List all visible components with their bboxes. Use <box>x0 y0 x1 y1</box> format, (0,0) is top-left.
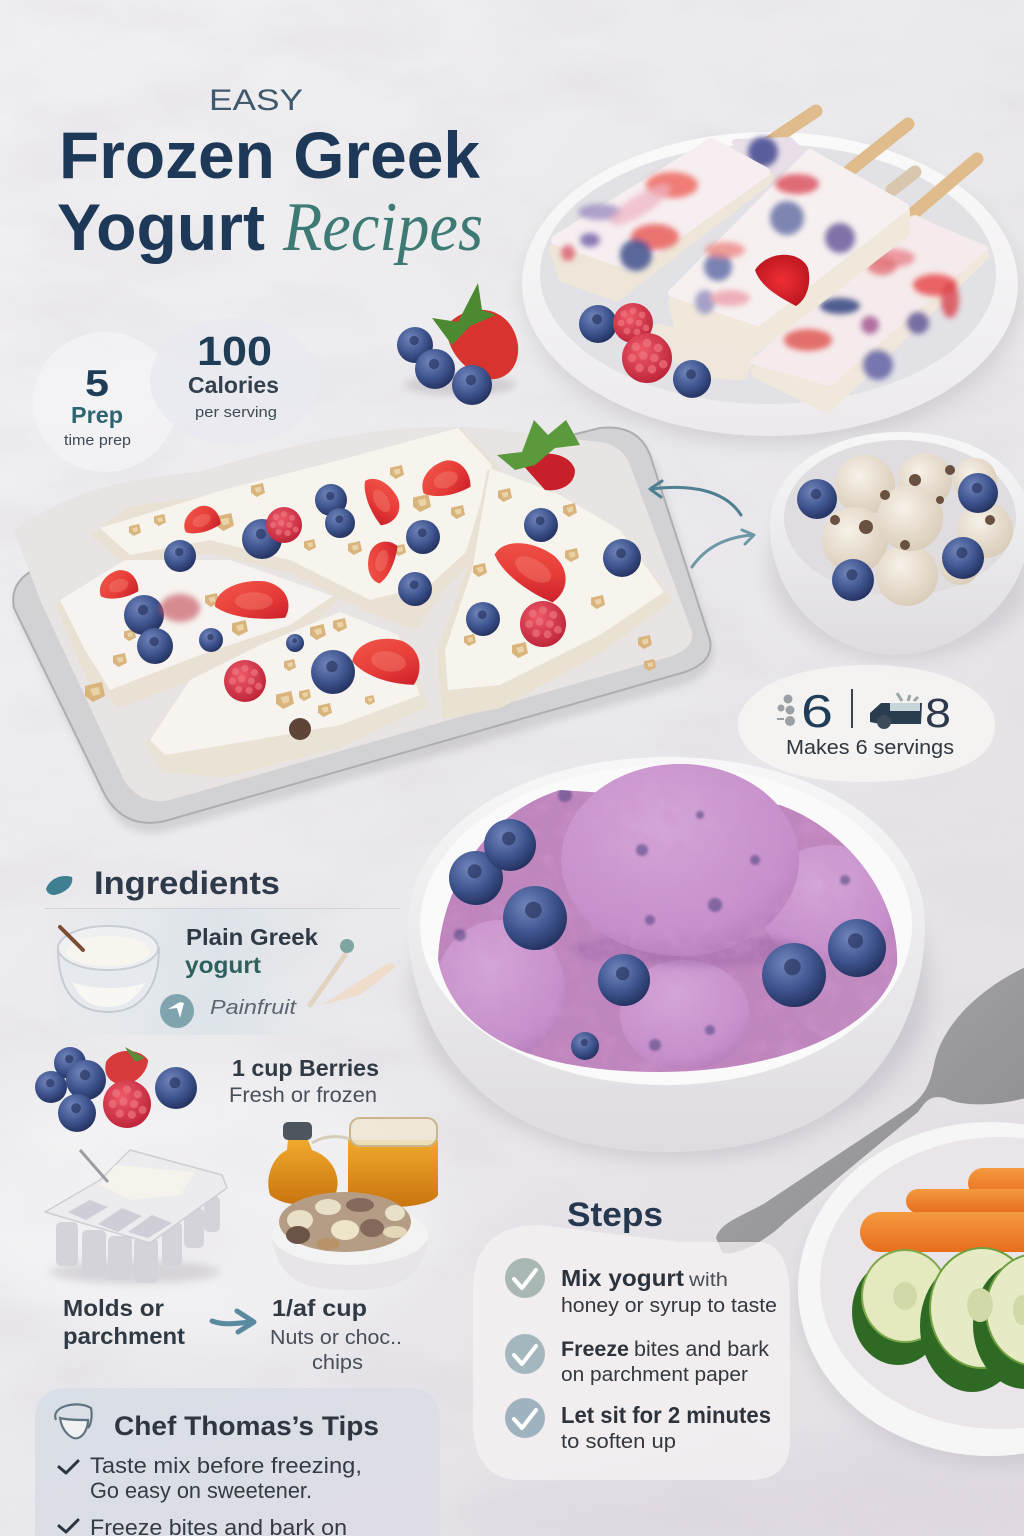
stat: calories: per serving <box>195 404 277 421</box>
popsicle left <box>556 143 767 294</box>
ingredient: nuts bowl <box>272 1192 428 1290</box>
servings pill: 8 <box>925 690 951 736</box>
blueberries <box>124 484 641 694</box>
servings pill <box>738 665 995 782</box>
step 2: bites and bark <box>634 1338 770 1361</box>
ingredient nuts label: 1/af cup <box>272 1295 367 1321</box>
icon: chef <box>55 1404 92 1438</box>
stat: calories: Calories <box>188 372 279 398</box>
ice cream <box>430 760 910 1080</box>
ingredient berries label <box>229 1055 379 1107</box>
stat: prep: 5 <box>85 363 109 404</box>
stat: prep <box>33 332 177 472</box>
yogurt bites <box>797 453 1013 606</box>
panel: chef tips: Go easy on sweetener. <box>90 1478 312 1503</box>
title: Recipes <box>282 189 483 266</box>
step 2: on parchment paper <box>561 1364 748 1386</box>
popsicle plate <box>522 111 1020 445</box>
sheet tray of yogurt bark <box>13 420 713 833</box>
panel: chef tips: Chef Thomas’s Tips <box>114 1411 379 1441</box>
step 1: Mix yogurt <box>561 1265 684 1291</box>
icon: tray <box>870 693 922 729</box>
step 2 <box>505 1334 770 1386</box>
ingredient: syrup bottle <box>268 1122 352 1205</box>
ice cream blueberries <box>449 819 886 1060</box>
arrow <box>212 1311 254 1332</box>
popsicle centre <box>672 153 905 346</box>
stick decoration <box>310 939 396 1005</box>
title <box>57 84 483 266</box>
stat: prep: Prep <box>71 402 123 428</box>
ingredient berries label: 1 cup Berries <box>232 1055 379 1081</box>
popsicle lower centre <box>658 330 750 374</box>
popsicle back berry pop <box>735 140 805 175</box>
step 1: with <box>688 1270 728 1291</box>
popsicle right <box>752 218 986 406</box>
ingredient: mold tray <box>45 1150 227 1284</box>
bark piece right <box>440 468 668 716</box>
vegetable plate <box>798 1122 1024 1465</box>
ingredient nuts label: Nuts or choc.. <box>270 1327 402 1349</box>
panel: chef tips: Taste mix before freezing, <box>90 1453 362 1478</box>
tip checks <box>59 1461 78 1532</box>
ingredients heading: Ingredients <box>94 865 280 901</box>
ingredient: berries <box>35 1047 197 1132</box>
title: Yogurt <box>57 190 265 264</box>
icon: dots <box>777 694 795 726</box>
strawberry garnish <box>497 420 580 490</box>
loose berries <box>397 283 518 405</box>
bowl of yogurt bites <box>770 432 1024 660</box>
step 3: to soften up <box>561 1431 676 1453</box>
stat: prep: time prep <box>64 432 131 449</box>
ice cream bowl <box>408 757 930 1160</box>
title: EASY <box>209 84 303 117</box>
ingredient nuts label: chips <box>312 1352 363 1374</box>
step 3 <box>505 1398 771 1453</box>
ingredient: yogurt: Painfruit <box>210 997 298 1019</box>
ingredient molds label <box>63 1295 185 1349</box>
glass bowl of yogurt <box>58 926 159 1012</box>
ingredient: yogurt: Plain Greek <box>186 924 318 950</box>
popsicle sticks <box>762 111 977 212</box>
bark piece top <box>95 428 497 627</box>
icon: leaf <box>46 876 72 895</box>
ingredient berries label: Fresh or frozen <box>229 1084 377 1107</box>
servings pill: Makes 6 servings <box>786 737 954 759</box>
step 1 <box>505 1258 777 1317</box>
bark piece left <box>58 560 336 705</box>
step 3: Let sit for 2 minutes <box>561 1402 771 1428</box>
spoon <box>716 965 1024 1253</box>
curved arrows <box>650 481 754 567</box>
bark piece bottom <box>148 612 425 775</box>
servings pill: 6 <box>801 685 833 737</box>
panel: steps <box>473 1196 790 1480</box>
ingredient molds label: Molds or <box>63 1295 164 1321</box>
strawberries and raspberries <box>94 455 576 702</box>
carrots <box>860 1168 1024 1252</box>
parchment paper <box>14 427 692 801</box>
ingredient: yogurt <box>45 908 400 1035</box>
title: Frozen Greek <box>59 118 480 192</box>
stat: calories: 100 <box>197 328 272 374</box>
step 1: honey or syrup to taste <box>561 1295 777 1317</box>
ingredient: honey jar <box>348 1118 438 1207</box>
panel: chef tips <box>35 1388 440 1536</box>
nuts <box>85 465 656 740</box>
stat: calories <box>150 318 320 444</box>
cucumbers <box>852 1248 1024 1392</box>
ingredient molds label: parchment <box>63 1323 185 1349</box>
plate berries <box>579 303 711 398</box>
panel: steps: Steps <box>567 1196 663 1234</box>
ingredient: yogurt: yogurt <box>185 952 261 978</box>
step 2: Freeze <box>561 1338 629 1361</box>
round icon <box>160 994 194 1028</box>
ingredient nuts label <box>270 1295 402 1374</box>
